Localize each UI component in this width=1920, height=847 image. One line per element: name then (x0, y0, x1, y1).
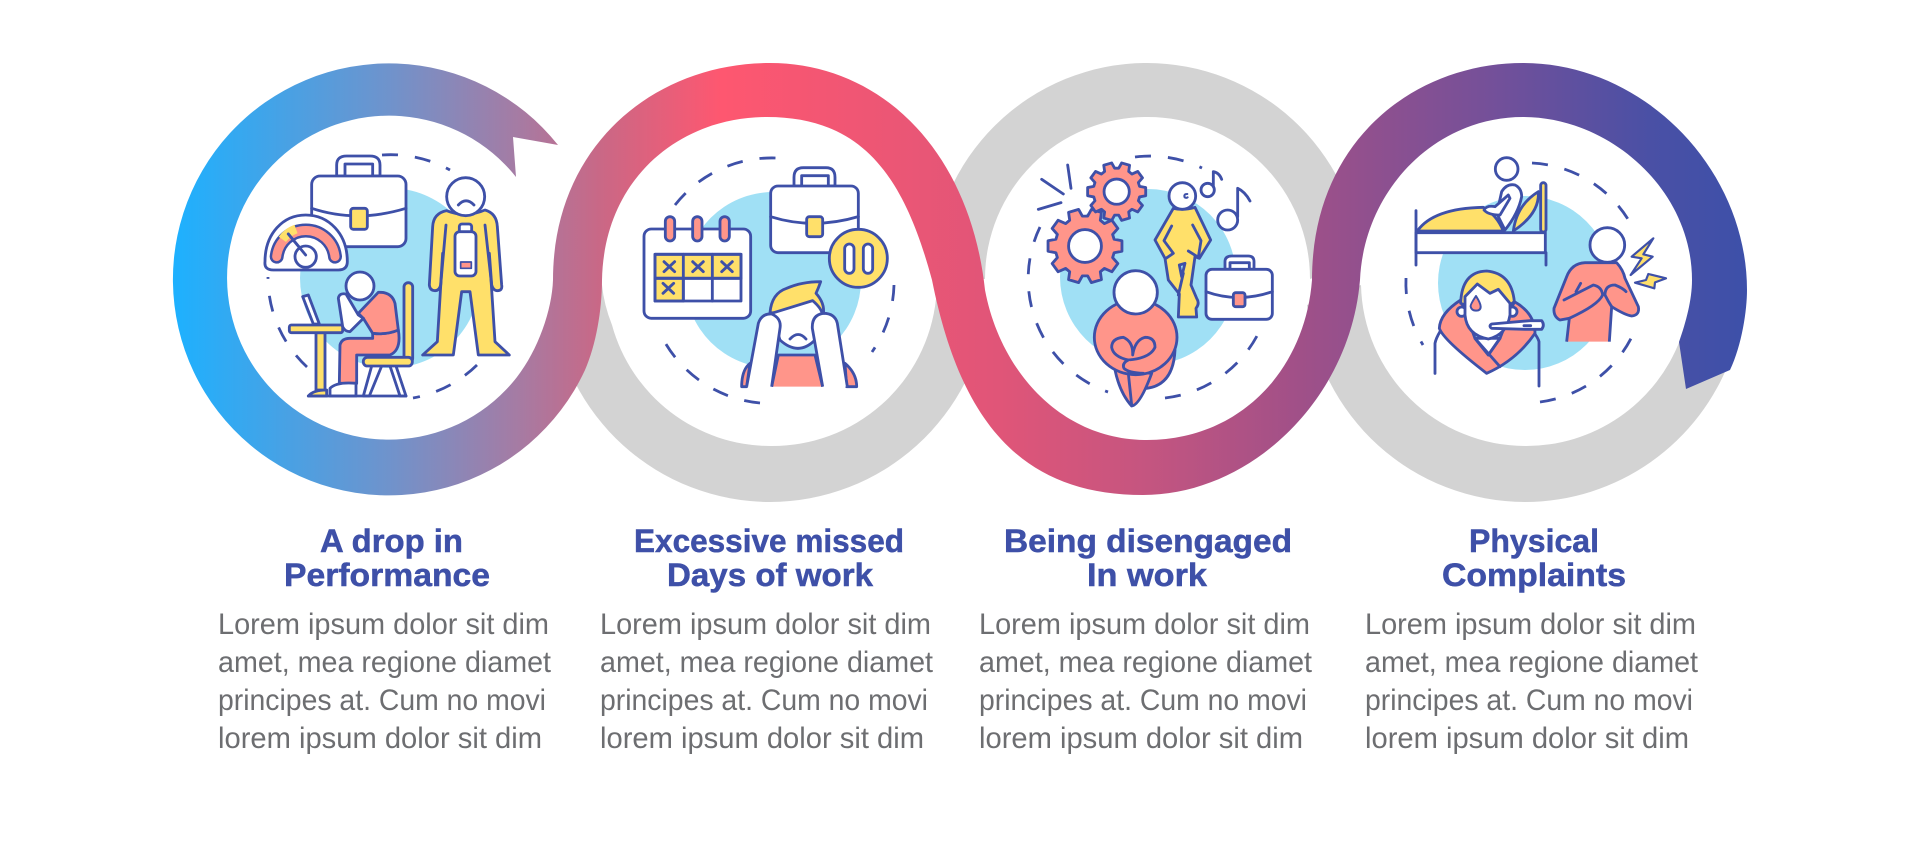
body text: Lorem ipsum dolor sit dim (600, 608, 931, 641)
icon: small gear (1088, 163, 1146, 220)
heading: Complaints (1442, 557, 1626, 593)
panel: disengaged in work illustration (1028, 156, 1272, 406)
icon group (644, 168, 887, 387)
heading: Physical (1469, 523, 1599, 559)
icon group (1038, 163, 1272, 406)
body text (1365, 608, 1699, 755)
icon group (1416, 158, 1666, 386)
panel: missed days of work illustration (644, 158, 894, 403)
body text (600, 608, 934, 755)
text block: being disengaged in work (979, 523, 1313, 755)
icon: briefcase with pause button (771, 168, 887, 287)
body text: lorem ipsum dolor sit dim (218, 722, 542, 755)
heading (634, 523, 904, 593)
body text: amet, mea regione diamet (1365, 646, 1699, 679)
body text: Lorem ipsum dolor sit dim (979, 608, 1310, 641)
icon: seated person hugging knees (1094, 271, 1177, 406)
heading: A drop in (320, 523, 463, 559)
heading (1004, 523, 1292, 593)
icon background disc (685, 192, 861, 368)
body text: amet, mea regione diamet (979, 646, 1313, 679)
dashed orbit (660, 158, 894, 403)
body text (979, 608, 1313, 755)
body text: Lorem ipsum dolor sit dim (218, 608, 549, 641)
body text (218, 608, 552, 755)
icon: briefcase (1206, 256, 1272, 319)
gradient ribbon arrow (173, 63, 1747, 495)
body text: principes at. Cum no movi (979, 684, 1307, 717)
icon: sick person with thermometer (1435, 271, 1543, 386)
icon: spark rays (1038, 165, 1071, 209)
heading: Excessive missed (634, 523, 904, 559)
body text: lorem ipsum dolor sit dim (1365, 722, 1689, 755)
grey background rings (552, 63, 1731, 502)
heading (1442, 523, 1626, 593)
heading: In work (1087, 557, 1207, 593)
icon: stressed person holding head (742, 282, 857, 387)
icon: person sitting up in bed (1416, 158, 1546, 265)
body text: principes at. Cum no movi (1365, 684, 1693, 717)
panel: a drop in performance illustration (265, 155, 509, 398)
body text: principes at. Cum no movi (600, 684, 928, 717)
icon: calendar with crossed days (644, 217, 751, 318)
icon background disc (1438, 196, 1612, 370)
icon: person with chest pain (1554, 228, 1666, 342)
icon group (265, 156, 509, 396)
text block: excessive missed days of work (600, 523, 934, 755)
dashed orbit (268, 155, 477, 398)
icon: person slumped at laptop (289, 272, 413, 396)
icon: exhausted standing person with low battery (423, 178, 509, 355)
heading: Performance (284, 557, 490, 593)
body text: principes at. Cum no movi (218, 684, 546, 717)
icon: speed gauge (265, 215, 347, 270)
icon: large gear (1048, 209, 1122, 283)
body text: lorem ipsum dolor sit dim (979, 722, 1303, 755)
panel: physical complaints illustration (1406, 158, 1666, 402)
dashed orbit (1406, 163, 1635, 402)
body text: amet, mea regione diamet (600, 646, 934, 679)
icon: music notes (1201, 172, 1250, 230)
icon background disc (1060, 189, 1236, 365)
heading: Days of work (667, 557, 873, 593)
heading: Being disengaged (1004, 523, 1292, 559)
dashed orbit (1028, 156, 1260, 398)
icon: person leaning with hands in pockets (1155, 183, 1211, 317)
text block: physical complaints (1365, 523, 1699, 755)
text block: a drop in performance (218, 523, 552, 755)
body text: amet, mea regione diamet (218, 646, 552, 679)
icon: briefcase (312, 156, 406, 247)
body text: lorem ipsum dolor sit dim (600, 722, 924, 755)
icon background disc (300, 188, 480, 368)
body text: Lorem ipsum dolor sit dim (1365, 608, 1696, 641)
heading (284, 523, 490, 593)
